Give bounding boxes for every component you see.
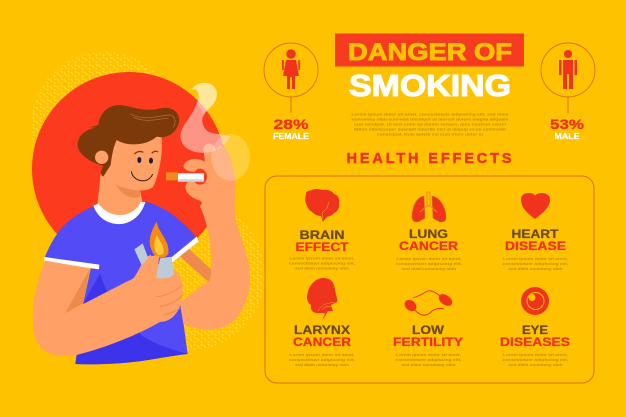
hair <box>78 105 179 177</box>
label: larynx cancer: LARYNX <box>294 323 350 337</box>
hair highlight <box>130 114 175 127</box>
female circle <box>264 43 318 97</box>
description: consectetuer adipiscing elit, <box>289 357 355 362</box>
description <box>289 352 355 367</box>
label: heart disease <box>505 227 566 253</box>
stat: female: FEMALE <box>273 131 309 141</box>
finger creases <box>157 285 183 315</box>
label: eye diseases: EYE <box>522 323 548 337</box>
icon: lungs <box>412 192 446 222</box>
red circle <box>32 72 226 266</box>
mouth <box>131 171 153 181</box>
description <box>289 256 355 270</box>
description <box>396 256 462 271</box>
texture circle: top left <box>31 52 177 198</box>
smoke body <box>180 103 230 153</box>
intro text: erat volutpat. Ut wisi enim ad minim veniam, quis nostrud exerci <box>354 122 506 126</box>
finger gap <box>193 169 207 185</box>
label: larynx cancer: CANCER <box>293 335 351 349</box>
icon: male <box>559 50 577 89</box>
label: brain effect: BRAIN <box>300 228 344 242</box>
description: Lorem ipsum dolor sit amet, <box>503 352 568 357</box>
shirt sleeve trim right <box>171 237 199 263</box>
raised arm <box>180 180 250 329</box>
panel: health effects <box>265 176 594 383</box>
shirt <box>44 202 199 364</box>
back arm <box>180 248 212 283</box>
description <box>396 352 462 367</box>
male connector <box>567 97 569 113</box>
description <box>502 352 568 367</box>
shirt collar <box>93 202 145 224</box>
description: Lorem ipsum dolor sit amet, <box>396 352 461 357</box>
cigarette <box>178 173 204 182</box>
description: consectetuer adipiscing elit, <box>502 261 568 266</box>
description: sed diam nonummy nibh <box>508 362 563 367</box>
shirt sleeve trim left <box>44 257 99 269</box>
description: sed diam nonummy nibh <box>402 266 457 271</box>
intro text: consequat. Duis autem vel eum iriure dolor in <box>377 132 484 136</box>
icon: larynx <box>307 278 337 321</box>
illustration: man smoking <box>33 83 250 364</box>
description: consectetuer adipiscing elit, <box>396 261 462 266</box>
description: consectetuer adipiscing elit, <box>502 357 568 362</box>
neck shadow <box>115 183 140 198</box>
label: lung cancer: CANCER <box>399 239 458 253</box>
description: Lorem ipsum dolor sit amet, <box>290 352 354 357</box>
title banner <box>335 34 524 66</box>
stat: male: MALE <box>554 131 580 141</box>
label: brain effect <box>296 228 349 254</box>
item: low fertility <box>393 291 463 367</box>
description: consectetuer adipiscing elit, <box>396 357 462 362</box>
lighter flame <box>150 222 168 258</box>
flame core <box>154 235 164 255</box>
title: danger of: DANGER OF <box>348 39 512 66</box>
icon: female <box>282 49 300 89</box>
icon: brain <box>305 189 339 222</box>
label: eye diseases: DISEASES <box>500 335 570 349</box>
label: heart disease: HEART <box>512 227 559 241</box>
lighter <box>134 243 174 278</box>
item: lung cancer <box>396 192 462 271</box>
item: larynx cancer <box>289 278 355 367</box>
ear <box>95 151 108 164</box>
eyebrows <box>134 151 158 154</box>
label: low fertility: LOW <box>412 323 445 337</box>
description: Lorem ipsum dolor sit amet, <box>396 256 462 261</box>
stat: female: 28% <box>274 116 309 132</box>
neck <box>97 173 143 217</box>
label: heart disease: DISEASE <box>505 239 566 253</box>
label: lung cancer <box>399 227 458 253</box>
description: sed diam nonummy nibh <box>402 362 456 367</box>
label: larynx cancer <box>293 323 351 349</box>
smoke puff <box>211 134 250 181</box>
label: low fertility: FERTILITY <box>393 335 463 349</box>
shirt shadow <box>75 273 188 364</box>
description: sed diam nonummy nibh <box>508 266 563 271</box>
label: low fertility <box>393 323 463 349</box>
male circle <box>541 43 595 97</box>
female connector <box>290 97 292 113</box>
description: Lorem ipsum dolor sit amet, <box>503 256 568 261</box>
fingers over lighter <box>142 255 163 287</box>
description: consectetuer adipiscing elit, <box>289 260 355 266</box>
face <box>102 137 162 190</box>
description: sed diam nonummy nibh <box>295 362 350 367</box>
heading: health effects: HEALTH EFFECTS <box>346 151 512 167</box>
smoke top <box>192 83 217 115</box>
stat: male <box>550 116 585 141</box>
cigarette filter <box>166 172 178 180</box>
item: eye diseases <box>500 287 570 367</box>
intro text <box>352 112 509 136</box>
description: sed diam nonummy nibh <box>295 266 350 270</box>
eyes <box>137 157 153 164</box>
item: brain effect <box>289 189 355 270</box>
arm inner shadow <box>65 268 90 313</box>
title: smoking: SMOKING <box>349 68 511 103</box>
icon: eye <box>521 287 549 315</box>
intro text: nonummy nibh euismod tincidunt ut laoreet dolore magna aliquam <box>352 116 509 122</box>
texture circle: bottom right <box>115 200 265 350</box>
label: lung cancer: LUNG <box>409 227 448 241</box>
hand holding cigarette <box>183 144 235 211</box>
item: heart disease <box>502 193 568 271</box>
description: Lorem ipsum dolor sit amet, <box>290 256 354 260</box>
icon: sperm cells <box>402 291 454 315</box>
label: brain effect: EFFECT <box>296 240 349 254</box>
intro text: Lorem ipsum dolor sit amet, consectetuer adipiscing elit, sed diam <box>352 112 509 116</box>
label: eye diseases <box>500 323 570 349</box>
icon: heart <box>521 193 550 219</box>
intro text: tation ullamcorper suscipit lobortis nisl ut aliquip ex ea commodo <box>354 126 507 132</box>
stat: male: 53% <box>550 116 585 132</box>
front arm and hand <box>33 255 183 356</box>
description <box>502 256 568 271</box>
stat: female <box>273 116 309 141</box>
